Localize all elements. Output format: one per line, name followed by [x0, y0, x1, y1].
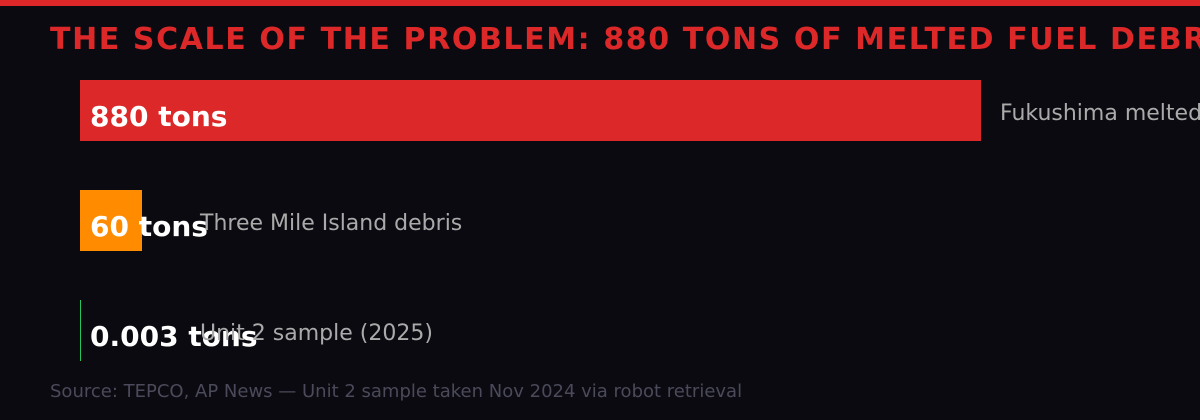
bar: Three Mile Island 60 tons — [80, 190, 142, 251]
top accent bar — [0, 0, 1200, 6]
bar: Unit 2 sample 0.003 tons — [80, 300, 81, 361]
description: Three Mile Island: Three Mile Island debris — [200, 211, 462, 236]
description: Unit 2 sample: Unit 2 sample (2025) — [200, 321, 433, 346]
bar: Fukushima 880 tons — [80, 80, 981, 141]
value label: 0.003 tons: 0.003 tons — [90, 320, 258, 353]
value label: 60 tons: 60 tons — [90, 210, 208, 243]
source note: Source: TEPCO, AP News — Unit 2 sample taken Nov 2024 via robot retrieval — [50, 381, 742, 402]
value label: 880 tons: 880 tons — [90, 100, 227, 133]
